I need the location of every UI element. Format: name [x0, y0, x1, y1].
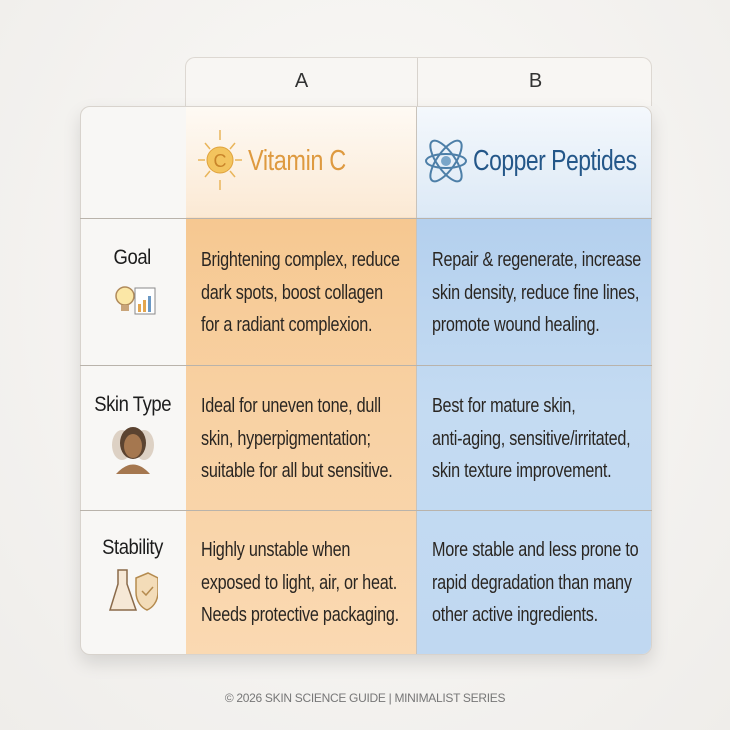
row label: Goal: Goal	[114, 246, 151, 269]
Copper: goal: promote wound healing.	[432, 314, 600, 336]
Vitamin C: goal: for a radiant complexion.	[201, 314, 372, 336]
Vitamin C: goal: Brightening complex, reduce	[201, 249, 400, 271]
Copper: goal	[432, 249, 641, 336]
Copper: goal: Repair & regenerate, increase	[432, 249, 641, 271]
icon: sun: C	[214, 151, 226, 171]
letter B	[417, 58, 653, 106]
column B background	[417, 107, 653, 656]
Copper: skin type	[432, 395, 630, 482]
Copper: stability: rapid degradation than many	[432, 572, 632, 594]
row label: Skin Type: Skin Type	[94, 393, 171, 416]
icon: atom	[425, 140, 467, 182]
row label: Goal	[114, 246, 156, 314]
Copper: goal: skin density, reduce fine lines,	[432, 282, 639, 304]
title: Copper Peptides: Copper Peptides	[473, 145, 637, 177]
title: Vitamin C: Vitamin C	[248, 145, 346, 177]
column letter header	[185, 57, 652, 106]
footer: © 2026 SKIN SCIENCE GUIDE | MINIMALIST SERIES	[225, 691, 505, 705]
Vitamin C: goal: dark spots, boost collagen	[201, 282, 383, 304]
Vitamin C: skin type	[201, 395, 392, 482]
Vitamin C: goal	[201, 249, 400, 336]
Copper: stability: More stable and less prone to	[432, 539, 638, 561]
Vitamin C: stability: Highly unstable when	[201, 539, 350, 561]
icon: flask shield	[109, 569, 158, 611]
table	[80, 106, 652, 655]
Vitamin C: stability: exposed to light, air, or heat.	[201, 572, 397, 594]
header: Vitamin C	[198, 130, 346, 190]
Vitamin C: skin type: skin, hyperpigmentation;	[201, 428, 371, 450]
letter B: B	[529, 70, 542, 92]
Vitamin C: skin type: suitable for all but sensitive.	[201, 460, 392, 482]
icon: bulb chart	[115, 286, 156, 314]
row label: Skin Type	[94, 393, 171, 474]
Vitamin C: stability	[201, 539, 399, 626]
row label: Stability	[102, 536, 164, 611]
Copper: stability	[432, 539, 638, 626]
Copper: stability: other active ingredients.	[432, 604, 598, 626]
letter A: A	[295, 70, 308, 92]
header: Copper Peptides	[425, 140, 637, 182]
Copper: skin type: skin texture improvement.	[432, 460, 611, 482]
icon: sun	[198, 130, 242, 190]
Vitamin C: stability: Needs protective packaging.	[201, 604, 399, 626]
Vitamin C: skin type: Ideal for uneven tone, dull	[201, 395, 381, 417]
icon: faces	[112, 427, 154, 474]
Copper: skin type: Best for mature skin,	[432, 395, 575, 417]
column A background	[186, 107, 417, 656]
row label: Stability: Stability	[102, 536, 163, 559]
Copper: skin type: anti-aging, sensitive/irritated,	[432, 428, 630, 450]
